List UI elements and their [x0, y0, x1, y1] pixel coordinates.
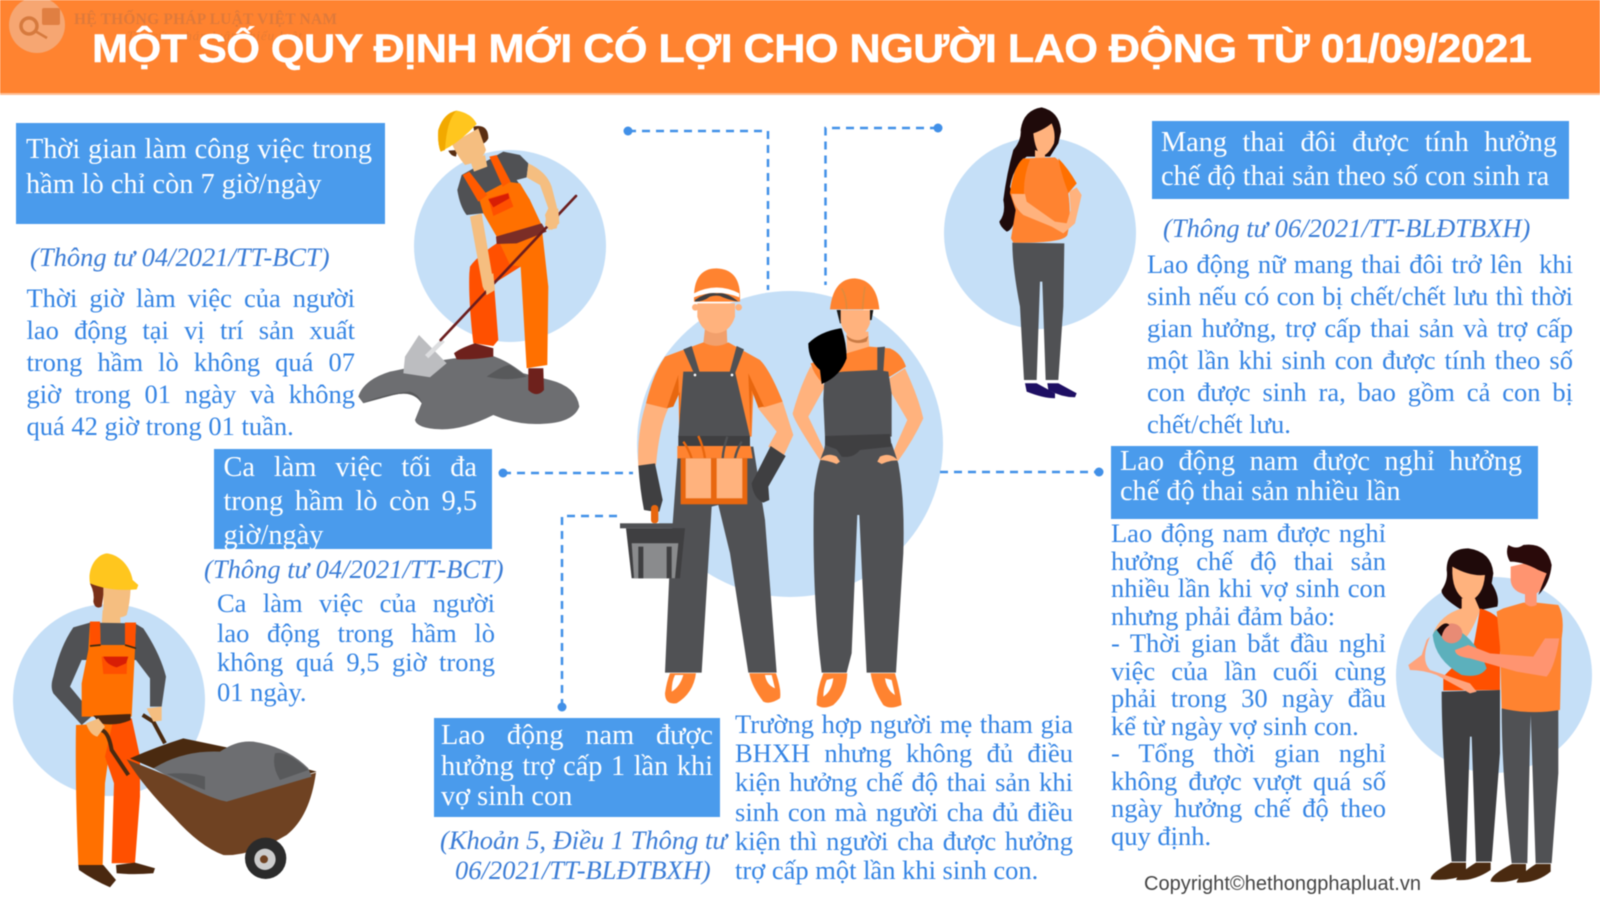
icon: male and female workers	[620, 268, 923, 707]
male worker	[620, 268, 793, 703]
text: twins detail: con được sinh ra, bao gồm cả con bị	[1147, 376, 1573, 406]
watermark slogan: Tra cứu pháp luật - hiểu luật	[127, 28, 302, 43]
heading: paternity: Lao động nam được nghỉ hưởng	[1120, 446, 1522, 476]
text: 7 hours detail: Thời giờ làm việc của người	[26, 282, 355, 312]
heading: one-time allowance: Lao động nam được	[441, 720, 713, 751]
header band	[0, 0, 1600, 95]
icon: couple with baby	[1408, 545, 1563, 883]
text: twins detail: gian hưởng, trợ cấp thai sản và trợ cấp	[1147, 312, 1573, 342]
heading: 7 hours: hầm lò chỉ còn 7 giờ/ngày	[26, 169, 322, 200]
citation: clause 5	[440, 825, 730, 885]
heading: 9.5 hours: trong hầm lò còn 9,5	[224, 486, 477, 516]
text: 9.5 hours detail: không quá 9,5 giờ trong	[217, 647, 495, 677]
text: twins detail: sinh nếu có con bị chết/chết lưu thì thời	[1147, 280, 1573, 310]
text: paternity detail: việc của lần cuối cùng	[1111, 656, 1386, 686]
text: 9.5 hours detail	[217, 588, 496, 708]
heading: one-time allowance: hưởng trợ cấp 1 lần khi	[441, 751, 713, 782]
heading: 7 hours	[26, 134, 372, 200]
text: one-time allowance detail: kiện thì người cha được hưởng	[735, 826, 1073, 856]
text: paternity detail: hưởng chế độ thai sản	[1111, 546, 1386, 576]
heading: 7 hours: Thời gian làm công việc trong	[26, 134, 372, 165]
panel: 7 hours box	[16, 123, 385, 224]
text: one-time allowance detail: BHXH nhưng không đủ điều	[735, 738, 1073, 768]
heading: twins	[1161, 126, 1558, 192]
text: twins detail: một lần khi sinh con được tính theo số	[1147, 344, 1573, 374]
text: twins detail: chết/chết lưu.	[1147, 408, 1291, 438]
text: paternity detail: phải trong 30 ngày đầu	[1111, 683, 1386, 713]
text: 7 hours detail: trong hầm lò không quá 07	[26, 346, 355, 376]
text: paternity detail: quy định.	[1111, 820, 1211, 850]
heading: 9.5 hours	[223, 452, 478, 550]
panel: paternity box	[1111, 446, 1538, 519]
text: paternity detail: ngày hưởng chế độ theo	[1111, 793, 1386, 823]
heading: one-time allowance: vợ sinh con	[441, 781, 572, 812]
heading: paternity	[1120, 446, 1522, 506]
citation: circular 04 second: (Thông tư 04/2021/TT-BCT)	[204, 554, 504, 584]
title: MỘT SỐ QUY ĐỊNH MỚI CÓ LỢI CHO NGƯỜI LAO ĐỘNG TỪ 01/09/2021	[92, 26, 1532, 71]
text: 9.5 hours detail: lao động trong hầm lò	[217, 618, 495, 648]
copyright: Copyright©hethongphapluat.vn	[1144, 873, 1421, 895]
icon: pregnant woman	[999, 107, 1082, 398]
heading: paternity: chế độ thai sản nhiều lần	[1120, 476, 1401, 506]
text: paternity detail	[1110, 518, 1386, 852]
text: paternity detail: nhiều lần khi vợ sinh con	[1111, 573, 1386, 603]
text: 7 hours detail: quá 42 giờ trong 01 tuần.	[26, 410, 294, 440]
text: one-time allowance detail: Trường hợp người mẹ tham gia	[735, 709, 1073, 739]
citation: circular 06: (Thông tư 06/2021/TT-BLĐTBXH)	[1163, 213, 1530, 243]
text: paternity detail: kể từ ngày vợ sinh con.	[1111, 710, 1359, 740]
heading: 9.5 hours: giờ/ngày	[224, 520, 323, 550]
text: paternity detail: - Thời gian bắt đầu nghỉ	[1111, 628, 1386, 658]
text: paternity detail: - Tổng thời gian nghỉ	[1111, 738, 1386, 768]
text: 7 hours detail: giờ trong 01 ngày và không	[26, 378, 355, 408]
panel: 9.5 hours box	[214, 449, 492, 549]
text: one-time allowance detail	[734, 709, 1074, 886]
heading: one-time allowance	[440, 720, 713, 812]
text: twins detail: Lao động nữ mang thai đôi trở lên khi	[1147, 248, 1573, 278]
text: one-time allowance detail: trợ cấp một lần khi sinh con.	[735, 855, 1038, 885]
background circles	[13, 137, 1592, 796]
icon: miner with shovel	[358, 111, 579, 429]
connector dots	[498, 124, 1104, 712]
heading: twins: Mang thai đôi được tính hưởng	[1161, 126, 1557, 158]
text: twins detail	[1147, 248, 1574, 438]
female worker	[793, 278, 923, 707]
connector lines	[503, 128, 1099, 707]
watermark logo	[9, 0, 65, 53]
citation: circular 04: (Thông tư 04/2021/TT-BCT)	[30, 242, 330, 272]
text: one-time allowance detail: kiện hưởng chế độ thai sản khi	[735, 767, 1073, 797]
text: 7 hours detail: lao động tại vị trí sản xuất	[26, 314, 355, 344]
icon: worker with wheelbarrow	[52, 553, 317, 887]
panel: twins box	[1152, 121, 1569, 199]
text: paternity detail: nhưng phải đảm bảo:	[1111, 600, 1335, 630]
watermark name: HỆ THỐNG PHÁP LUẬT VIỆT NAM	[74, 10, 337, 28]
citation: clause 5: (Khoản 5, Điều 1 Thông tư	[440, 825, 727, 855]
heading: 9.5 hours: Ca làm việc tối đa	[224, 452, 477, 482]
text: paternity detail: không được vượt quá số	[1111, 766, 1386, 796]
text: paternity detail: Lao động nam được nghỉ	[1111, 518, 1386, 548]
heading: twins: chế độ thai sản theo số con sinh ra	[1161, 160, 1549, 192]
panel: one-time allowance box	[434, 718, 720, 817]
text: 9.5 hours detail: Ca làm việc của người	[217, 588, 495, 618]
text: one-time allowance detail: sinh con mà người cha đủ điều	[735, 797, 1073, 827]
text: 9.5 hours detail: 01 ngày.	[217, 677, 307, 707]
text: 7 hours detail	[26, 282, 356, 442]
citation: clause 5: 06/2021/TT-BLĐTBXH)	[455, 855, 711, 885]
